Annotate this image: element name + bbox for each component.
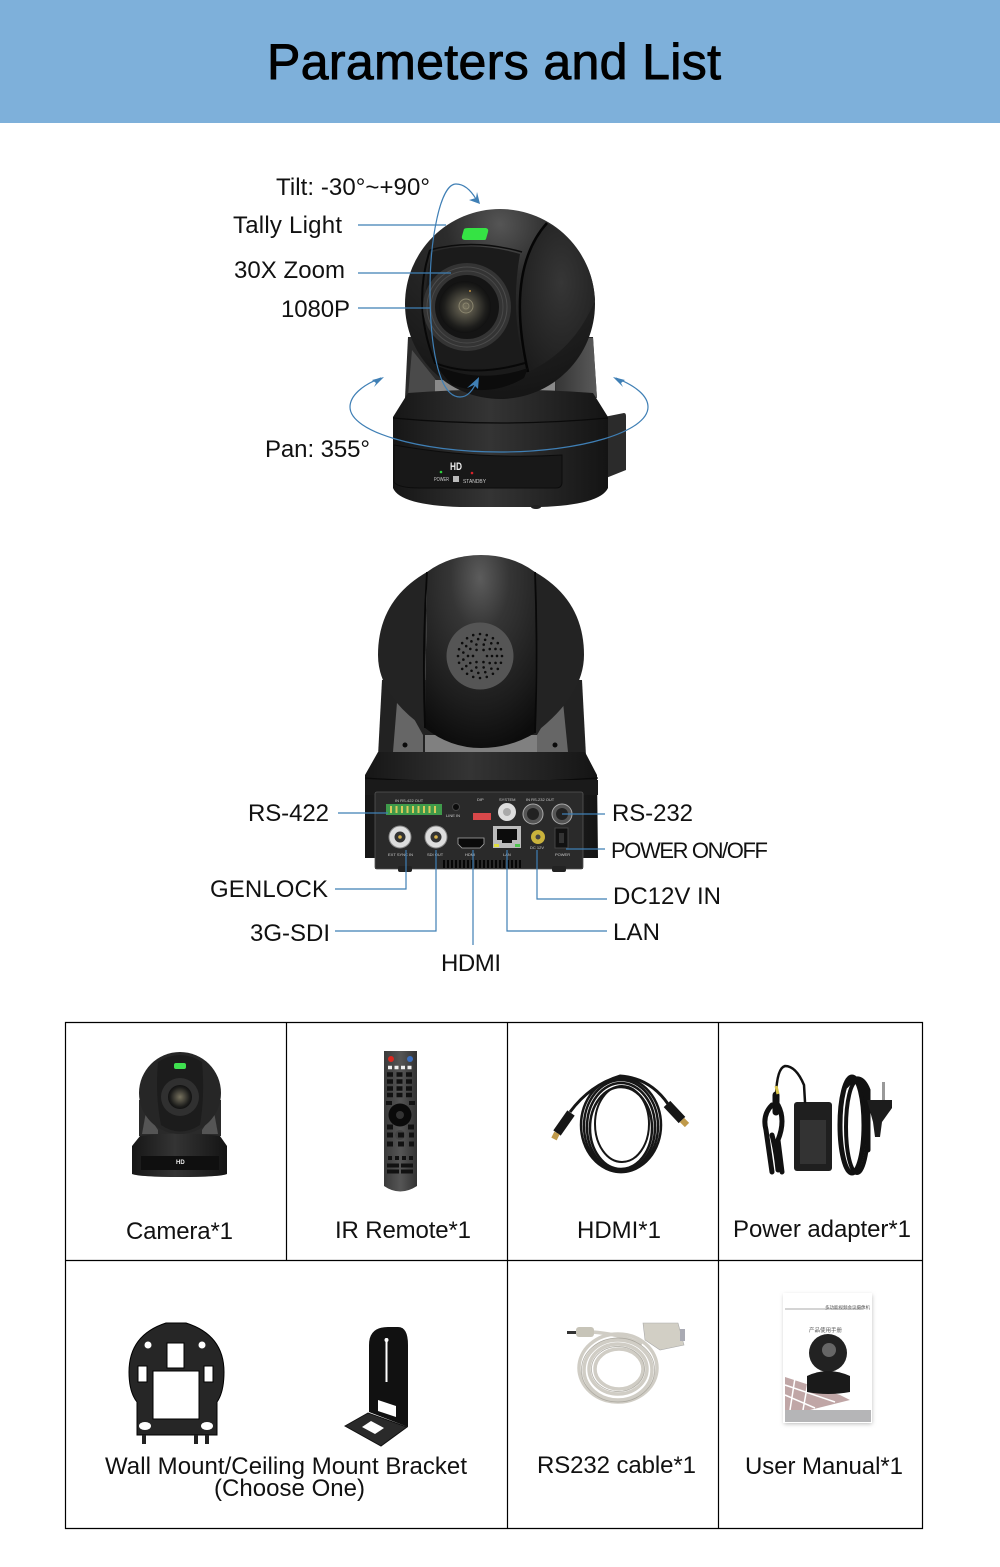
leader: Tally Light — [358, 224, 446, 226]
leader: RS-422 — [338, 812, 388, 814]
item: camera: HD — [176, 1160, 185, 1166]
label: RS-232: RS-232 — [612, 800, 693, 827]
packing list table — [66, 1022, 922, 1528]
DIP switch: DIP — [477, 797, 484, 802]
RS-422 terminal: IN RS-422 OUT — [395, 798, 424, 803]
caption: Wall/Ceiling Mount Bracket — [105, 1453, 467, 1502]
line in: LINE IN — [446, 813, 460, 818]
label: RS-422: RS-422 — [248, 800, 329, 827]
caption: RS232 cable: RS232 cable*1 — [537, 1452, 696, 1479]
line in — [446, 804, 460, 818]
rear yoke — [378, 680, 586, 756]
label: 1080P: 1080P — [281, 296, 350, 323]
system dial — [498, 797, 516, 821]
rear camera illustration — [365, 555, 598, 872]
RS-422 terminal — [386, 798, 442, 815]
front panel labels: HD — [450, 461, 462, 473]
HDMI port — [458, 838, 484, 857]
system dial: SYSTEM — [499, 797, 515, 802]
item: user manual: 多功能视频会议摄像机 — [825, 1304, 870, 1311]
leader: 30X Zoom — [358, 272, 451, 274]
item: power adapter — [765, 1066, 892, 1173]
leader: DC12V IN — [537, 850, 607, 899]
label: GENLOCK: GENLOCK — [210, 876, 328, 903]
DIP switch — [473, 797, 491, 820]
leader: 1080P — [358, 307, 430, 309]
camera lens — [423, 263, 511, 351]
caption: Wall/Ceiling Mount Bracket: (Choose One) — [214, 1475, 365, 1502]
BNC connectors: EXT SYNC IN — [388, 852, 413, 857]
power switch: POWER — [555, 852, 570, 857]
LAN port: LAN — [503, 852, 511, 857]
HDMI port: HDMI — [465, 852, 475, 857]
leader: POWER ON/OFF — [566, 848, 605, 850]
title: Parameters and List — [267, 34, 721, 90]
power switch — [555, 828, 570, 857]
rear base — [365, 752, 598, 869]
vent slots — [443, 860, 523, 868]
caption: User Manual: User Manual*1 — [745, 1453, 903, 1480]
item: user manual: 产品使用手册 — [809, 1326, 843, 1334]
item: user manual — [783, 1293, 872, 1424]
caption: Wall/Ceiling Mount Bracket: Wall Mount/Ceiling Mount Bracket — [105, 1453, 467, 1480]
label: 30X Zoom: 30X Zoom — [234, 257, 345, 284]
label: LAN: LAN — [613, 919, 660, 946]
camera sphere — [405, 209, 595, 399]
label: Pan: Pan: 355° — [265, 436, 370, 463]
label: HDMI: HDMI — [441, 950, 501, 977]
tally light — [462, 228, 488, 240]
RS-232 ports: IN RS-232 OUT — [526, 797, 555, 802]
LAN port — [493, 826, 521, 857]
caption: Power adapter: Power adapter*1 — [733, 1216, 911, 1243]
label: Tally Light: Tally Light — [233, 212, 342, 239]
caption: Camera: Camera*1 — [126, 1218, 233, 1245]
front camera illustration — [393, 209, 626, 509]
leader: LAN — [507, 850, 607, 931]
leader: GENLOCK — [335, 850, 406, 889]
front panel labels — [434, 461, 486, 485]
rear sphere — [425, 555, 535, 748]
item: camera — [132, 1052, 227, 1177]
item: IR remote — [384, 1051, 417, 1192]
arrow: tilt rotation — [430, 184, 480, 397]
speaker grille — [446, 622, 514, 690]
label: POWER ON/OFF: POWER ON/OFF — [611, 838, 768, 863]
leader: RS-232 — [562, 813, 605, 815]
caption: HDMI: HDMI*1 — [577, 1217, 661, 1244]
item: RS232 cable — [567, 1323, 685, 1402]
BNC connectors — [388, 826, 447, 857]
leader: 3G-SDI — [335, 850, 436, 931]
DC port — [530, 830, 545, 850]
item: HDMI cable — [554, 1076, 687, 1172]
DC port: DC 12V — [530, 845, 544, 850]
camera base — [393, 390, 608, 507]
RS-232 ports — [523, 797, 572, 824]
item: wall mount plate — [129, 1323, 224, 1444]
item: L bracket — [345, 1327, 408, 1446]
label: Tilt: Tilt: -30°~+90° — [276, 174, 430, 201]
front panel labels: STANDBY — [463, 479, 486, 485]
header banner — [0, 0, 1000, 123]
camera yoke — [405, 337, 597, 398]
camera side box — [604, 413, 626, 478]
rear connector panel — [375, 792, 583, 872]
leader: HDMI — [472, 850, 474, 945]
arrow: pan rotation — [350, 377, 648, 452]
label: 3G-SDI: 3G-SDI — [250, 920, 330, 947]
front panel labels: POWER — [434, 477, 449, 483]
label: DC12V IN: DC12V IN — [613, 883, 721, 910]
BNC connectors: SDI OUT — [427, 852, 444, 857]
caption: IR Remote: IR Remote*1 — [335, 1217, 471, 1244]
